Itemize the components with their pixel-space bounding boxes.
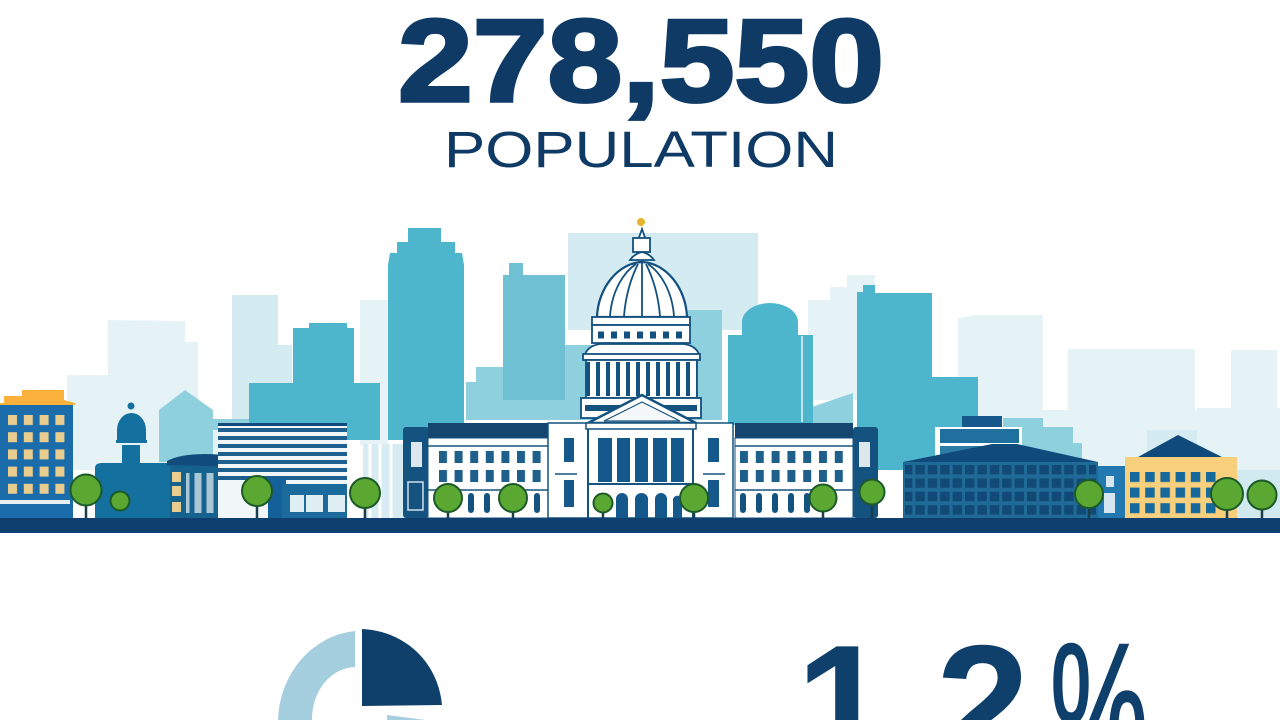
small blue building xyxy=(1098,466,1125,518)
donut chart xyxy=(278,629,442,720)
mid-tone buildings xyxy=(159,310,1280,517)
striped low-rise building xyxy=(218,423,347,518)
left corner building with yellow roof xyxy=(0,390,75,518)
teal towers xyxy=(249,228,978,470)
capitol building xyxy=(403,218,878,518)
pale line on domed tower xyxy=(801,336,803,422)
pale background buildings xyxy=(67,275,1280,520)
trees xyxy=(70,474,1276,518)
donut dark segment xyxy=(362,629,442,706)
yellow building with dark roof xyxy=(1125,435,1237,518)
capitol centre block and portico xyxy=(548,395,733,518)
light background towers xyxy=(232,233,1197,460)
finial xyxy=(637,218,645,226)
growth figure xyxy=(796,605,1148,720)
right dark office building xyxy=(903,444,1098,518)
capitol wings xyxy=(403,423,878,518)
left domed building xyxy=(95,402,172,518)
donut light segment xyxy=(278,631,355,720)
subtitle: population label: POPULATION xyxy=(444,121,838,178)
ground strip xyxy=(0,518,1280,533)
capitol dome xyxy=(581,229,701,418)
skyline illustration xyxy=(0,218,1280,533)
pale glass building xyxy=(363,444,403,518)
small building with dark roof xyxy=(167,454,245,518)
mid teal tower xyxy=(503,263,565,400)
donut lower light segment xyxy=(387,715,425,720)
right mid-rise behind dark building xyxy=(935,416,1022,458)
